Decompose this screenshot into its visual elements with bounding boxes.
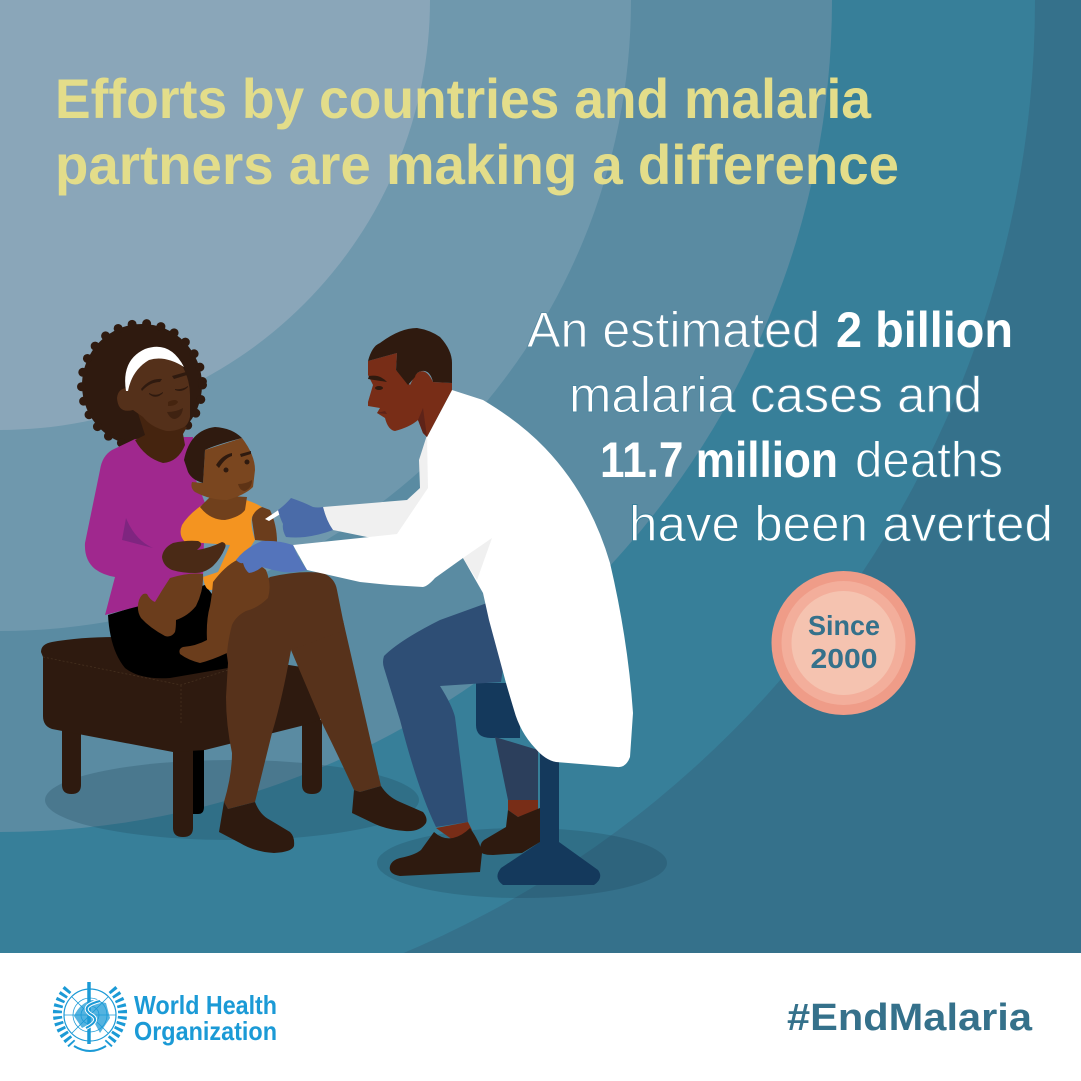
lower glove: [236, 541, 307, 573]
doctor's front sock: [436, 822, 472, 840]
mother's hand: [162, 541, 226, 573]
woman's shoes: [219, 786, 427, 853]
neck: [135, 410, 187, 463]
statistic text block: [527, 302, 1053, 552]
bench: [41, 637, 322, 837]
baby's neck: [200, 495, 247, 520]
statistic text block: malaria cases and: [569, 367, 982, 423]
upper glove: [278, 498, 333, 538]
statistic text block: have been averted: [629, 496, 1053, 552]
stool: [476, 683, 600, 885]
WHO wordmark: [134, 990, 277, 1046]
badge: since 2000: Since: [808, 610, 880, 641]
doctor's back leg: [495, 737, 538, 800]
hashtag: #EndMalaria: [787, 997, 1033, 1039]
WHO wordmark: World Health: [134, 990, 277, 1020]
floor shadows: [45, 760, 667, 898]
sleeve fold: [122, 518, 153, 548]
statistic text block: An estimated: [527, 302, 820, 358]
coat shading: back sleeve: [323, 435, 430, 538]
WHO emblem: [57, 982, 123, 1051]
title: partners are making a difference: [55, 133, 899, 196]
white coat: [293, 390, 633, 767]
doctor's brow and eye: [368, 376, 387, 414]
statistic text block: deaths: [855, 432, 1003, 488]
badge: since 2000: [772, 571, 916, 715]
baby's arm: [252, 507, 277, 542]
orange top: [181, 499, 262, 590]
neck shadow: [418, 408, 427, 437]
doctor's face and neck: [368, 353, 452, 437]
doctor's hair: [368, 328, 452, 385]
baby's face: [191, 438, 255, 500]
baby: [138, 427, 277, 663]
woman's shorts: [108, 585, 232, 678]
syringe: [265, 501, 295, 521]
baby's hair: [184, 427, 242, 483]
doctor's front leg: [383, 603, 510, 827]
purple top: [85, 437, 205, 615]
WHO wordmark: Organization: [134, 1016, 277, 1046]
doctor's back sock: [508, 800, 538, 817]
woman's back leg: [291, 620, 381, 792]
badge: since 2000: 2000: [810, 643, 878, 674]
statistic text block: 11.7 million: [600, 432, 838, 488]
headband: [125, 347, 184, 391]
coat shadow: [463, 538, 492, 580]
doctor's back shoe: [480, 808, 540, 855]
hair: [82, 324, 202, 446]
footer band: [0, 953, 1081, 1081]
doctor: [236, 328, 633, 885]
doctor's front shoe: [390, 828, 482, 876]
face: [117, 352, 190, 431]
baby's facial features: [216, 451, 252, 491]
WHO logo: [57, 982, 277, 1051]
woman's thigh and front leg: [222, 572, 345, 809]
statistic text block: 2 billion: [836, 302, 1013, 358]
title: Efforts by countries and malaria: [55, 67, 872, 130]
title: [55, 67, 899, 196]
baby's legs: [138, 560, 270, 663]
facial features: [141, 372, 188, 419]
woman: [82, 324, 427, 853]
